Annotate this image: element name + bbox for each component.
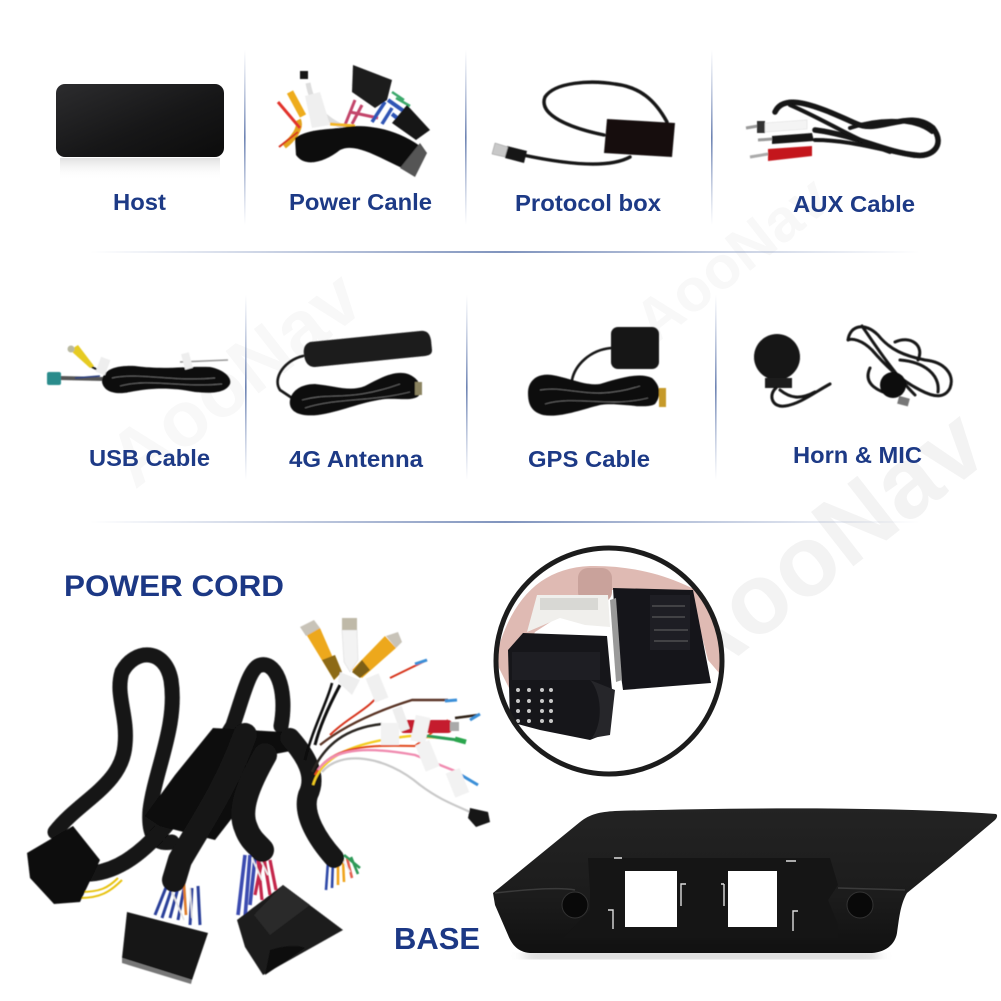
base screw holes (562, 892, 873, 918)
rca junction (338, 672, 360, 695)
thin wires (315, 685, 340, 745)
antenna coil (290, 373, 420, 415)
host reflection (60, 158, 220, 180)
wire tips (415, 660, 480, 785)
small harness connectors (352, 65, 392, 108)
item: protocol box (492, 82, 675, 216)
label: horn and mic: Horn & MIC (793, 442, 922, 468)
label: aux cable: AUX Cable (793, 191, 915, 217)
watermarks: AooNav (640, 386, 1001, 707)
label: gps cable: GPS Cable (528, 446, 650, 472)
wrapped trunk (145, 728, 296, 840)
inset ring (496, 548, 722, 774)
usb connector yellow (70, 345, 94, 368)
label: protocol box: Protocol box (515, 190, 661, 216)
base centre clip (608, 858, 798, 931)
small plug (300, 71, 308, 79)
wrapped branch to connector 2 (174, 735, 245, 880)
right black connector (613, 588, 711, 690)
yellow wires at connector 1 (80, 878, 122, 898)
base window right (728, 871, 777, 927)
wrapped branch to connector 3 (243, 755, 265, 850)
usb connector teal (47, 372, 61, 385)
label: power canle: Power Canle (289, 189, 432, 215)
connector 3 (237, 885, 343, 975)
usb cable labels (96, 357, 110, 375)
dividers (90, 50, 920, 523)
item: horn and mic (754, 326, 951, 468)
label: 4g antenna: 4G Antenna (289, 446, 423, 472)
inset circle: connectors (495, 548, 725, 774)
small harness white labels (305, 92, 330, 128)
small harness wires (308, 83, 345, 128)
aux art (746, 102, 938, 161)
base top highlight (495, 888, 905, 893)
pin holes (516, 688, 553, 723)
heading: power cord: POWER CORD (64, 570, 284, 603)
gps coil (528, 375, 659, 416)
base body (493, 808, 997, 953)
power cord harness (27, 618, 490, 984)
antenna cable (278, 356, 303, 398)
item: host (56, 84, 224, 215)
hand (495, 566, 725, 690)
silver strip (610, 598, 622, 682)
horn art (754, 326, 951, 406)
protocol art (492, 82, 675, 164)
protocol cable (544, 82, 667, 135)
rca plug: yellow right (352, 632, 402, 678)
gps connector (659, 388, 666, 407)
small plug (468, 808, 490, 827)
label: host: Host (113, 189, 166, 215)
wire bundle: connector 2 (155, 885, 200, 925)
usb art (47, 345, 230, 393)
watermarks: AooNav (622, 162, 842, 355)
mic coil (848, 326, 951, 396)
antenna connector (415, 382, 422, 395)
item: power cable (278, 65, 432, 215)
item: gps cable (528, 327, 666, 472)
inset photo contents (498, 566, 720, 740)
host screen (56, 84, 224, 157)
item: 4g antenna (278, 331, 432, 472)
usb leads (60, 378, 104, 379)
wire labels (366, 673, 388, 703)
horn wire (772, 384, 830, 406)
usb plug (505, 146, 527, 163)
watermarks: AooNav (91, 252, 378, 503)
antenna art (278, 331, 432, 415)
antenna body (304, 331, 432, 367)
base bezel (493, 808, 997, 958)
small harness group (278, 65, 430, 177)
item: aux cable (746, 102, 938, 217)
aux rca white (746, 126, 758, 128)
gps puck (611, 327, 659, 369)
small harness body (295, 126, 420, 168)
base shadow (525, 954, 878, 958)
mic capsule (880, 372, 906, 398)
aux rca red (750, 154, 768, 157)
wrapped branch to end 4 (290, 738, 334, 858)
wrapped cable to connector 1 (70, 728, 232, 874)
label: base: BASE (394, 921, 480, 956)
gps art (528, 327, 666, 416)
base recess (563, 858, 838, 938)
base window left (625, 871, 677, 927)
gps cable (572, 348, 611, 380)
wrapped cable loop 1 (55, 655, 172, 843)
connector 2 (122, 912, 208, 980)
left black connector (508, 633, 612, 740)
aux rca black (758, 139, 772, 140)
item: usb cable (47, 345, 230, 471)
protocol box unit (604, 119, 675, 157)
wrapped cable loop 2 (232, 665, 283, 728)
horn (754, 334, 800, 380)
white connector (527, 595, 610, 632)
connector 1 (27, 826, 100, 904)
usb coil (102, 366, 230, 393)
wire bundle: end 4 (326, 860, 333, 890)
aux coil (775, 102, 938, 155)
label: usb cable: USB Cable (89, 445, 210, 471)
rca plug: white (342, 618, 358, 672)
watermarks (91, 162, 1001, 707)
rca plug: yellow left (300, 620, 342, 680)
red rca plug (400, 720, 452, 733)
wire bundle: connector 3 (238, 855, 255, 918)
